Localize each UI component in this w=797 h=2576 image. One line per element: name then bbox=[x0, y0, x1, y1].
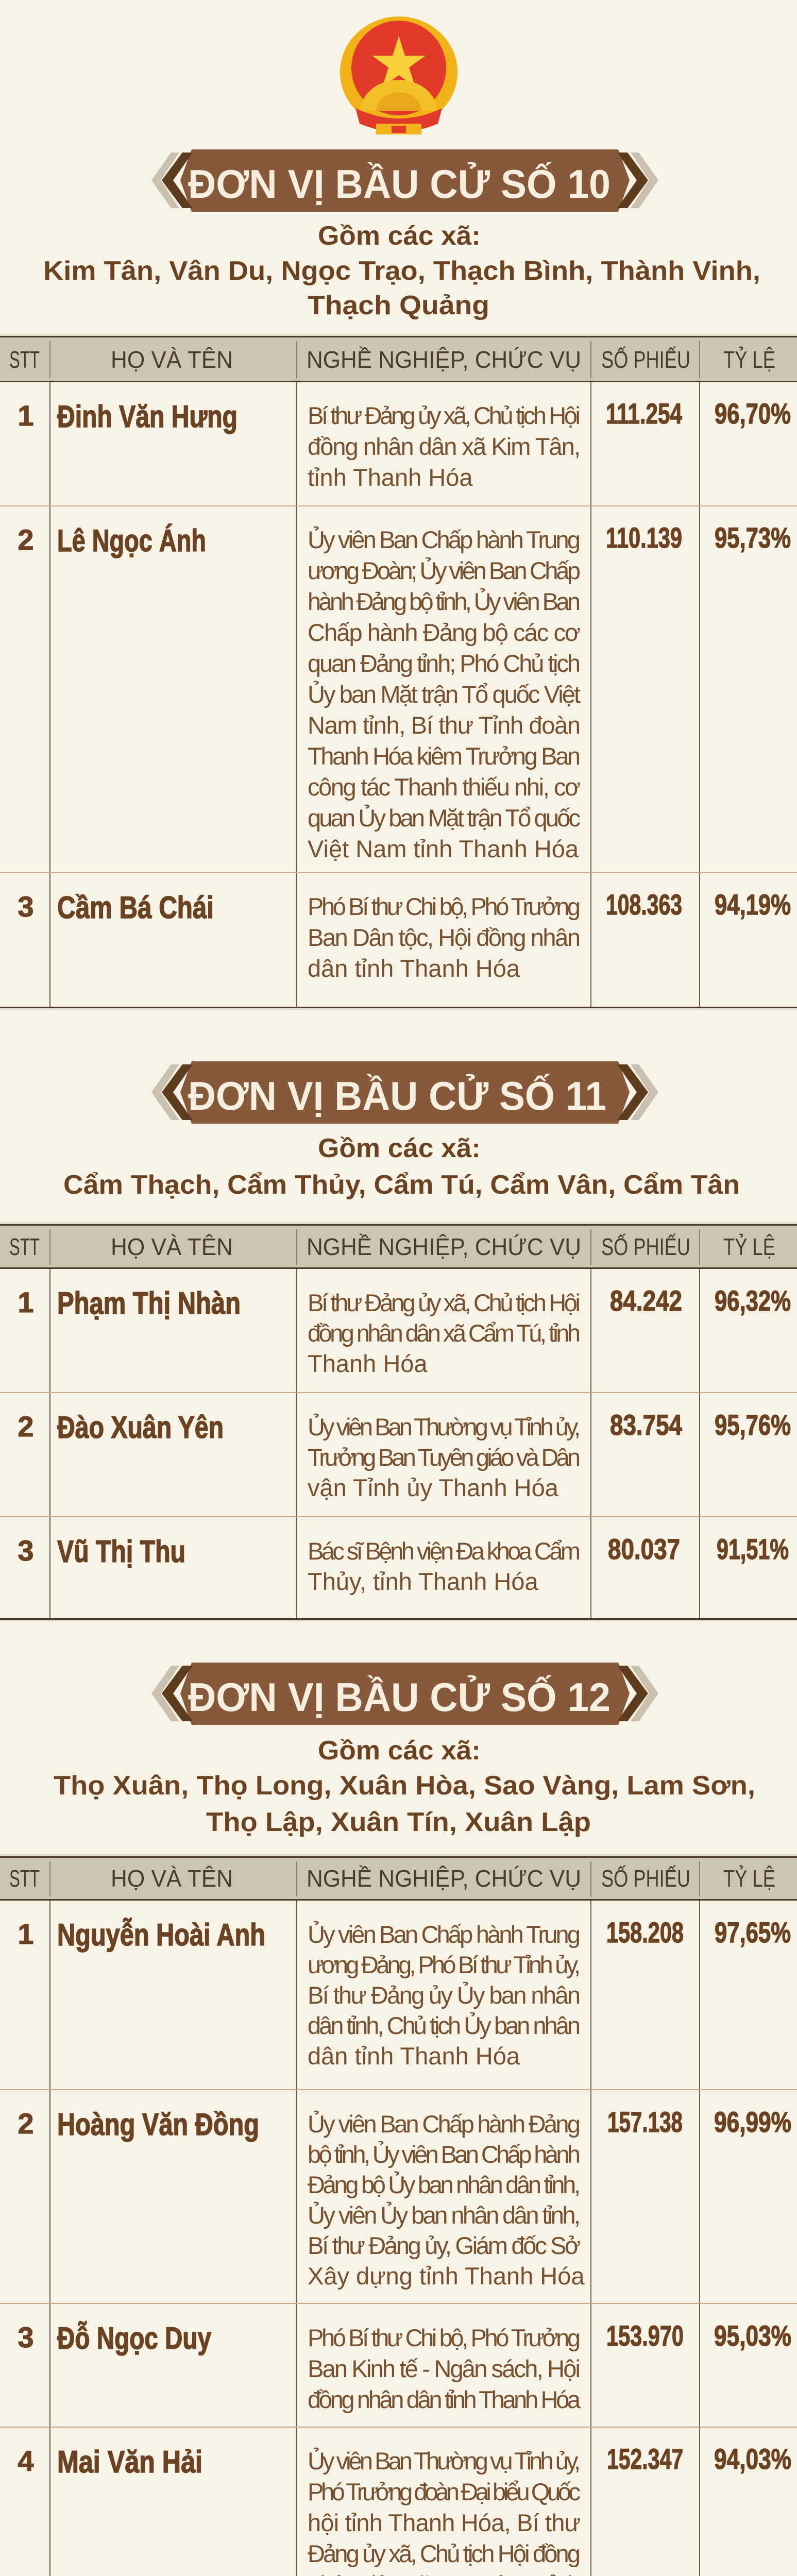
row: Lê Ngọc Ánh: 2 bbox=[18, 523, 34, 556]
row: Hoàng Văn Đồng: 157.138 bbox=[607, 2106, 683, 2138]
row: Đinh Văn Hưng: tỉnh Thanh Hóa bbox=[308, 464, 473, 491]
row: Cầm Bá Chái: Phó Bí thư Chi bộ, Phó Trưởng bbox=[308, 893, 581, 920]
table header: TỶ LỆ bbox=[723, 346, 775, 373]
row: Mai Văn Hải: 4 bbox=[18, 2445, 34, 2477]
subtitle: section 11 communes bbox=[63, 1133, 740, 1200]
row: Đào Xuân Yên: Ủy viên Ban Thường vụ Tỉnh ủy, bbox=[308, 1413, 581, 1440]
row: Đào Xuân Yên: 83.754 bbox=[610, 1409, 682, 1441]
row: Hoàng Văn Đồng: Ủy viên Ủy ban nhân dân tỉnh, bbox=[308, 2201, 581, 2229]
row: Đào Xuân Yên: Đào Xuân Yên bbox=[57, 1410, 224, 1445]
row: Lê Ngọc Ánh: Việt Nam tỉnh Thanh Hóa bbox=[308, 835, 579, 862]
table header: HỌ VÀ TÊN bbox=[111, 1233, 233, 1260]
banner: section 10 heading: ĐƠN VỊ BẦU CỬ SỐ 10 bbox=[188, 161, 611, 207]
row: Đỗ Ngọc Duy: Đỗ Ngọc Duy bbox=[57, 2321, 211, 2355]
row: Đỗ Ngọc Duy: Phó Bí thư Chi bộ, Phó Trưởng bbox=[308, 2324, 581, 2351]
row: Lê Ngọc Ánh: Nam tỉnh, Bí thư Tỉnh đoàn bbox=[308, 711, 581, 739]
row: Phạm Thị Nhàn: Thanh Hóa bbox=[308, 1350, 428, 1377]
row: Phạm Thị Nhàn: 1 bbox=[18, 1286, 34, 1318]
row: Đinh Văn Hưng: đồng nhân dân xã Kim Tân, bbox=[308, 433, 581, 460]
row: Nguyễn Hoài Anh: dân tỉnh, Chủ tịch Ủy ban nhân bbox=[308, 2012, 581, 2039]
row: Vũ Thị Thu: Vũ Thị Thu bbox=[57, 1534, 185, 1569]
row: Lê Ngọc Ánh: 110.139 bbox=[606, 521, 682, 554]
row: Lê Ngọc Ánh: Lê Ngọc Ánh bbox=[57, 523, 206, 558]
table header bbox=[0, 1222, 797, 1269]
row: Lê Ngọc Ánh: Ủy viên Ban Chấp hành Trung bbox=[308, 526, 581, 553]
subtitle: section 10 communes: Kim Tân, Vân Du, Ngọc Trạo, Thạch Bình, Thành Vinh, bbox=[43, 256, 760, 286]
row: Nguyễn Hoài Anh: Bí thư Đảng ủy Ủy ban nhân bbox=[308, 1981, 581, 2009]
row: Lê Ngọc Ánh: quan Đảng tỉnh; Phó Chủ tịch bbox=[308, 650, 581, 677]
subtitle: section 11 communes: Cẩm Thạch, Cẩm Thủy, Cẩm Tú, Cẩm Vân, Cẩm Tân bbox=[63, 1170, 740, 1200]
table header: NGHỀ NGHIỆP, CHỨC VỤ bbox=[307, 1233, 581, 1260]
row: Mai Văn Hải: 152.347 bbox=[607, 2443, 683, 2475]
row: Nguyễn Hoài Anh: 1 bbox=[18, 1918, 34, 1950]
subtitle: section 10 communes: Gồm các xã: bbox=[318, 221, 481, 251]
row: Lê Ngọc Ánh: Thanh Hóa kiêm Trưởng Ban bbox=[308, 742, 581, 770]
row: Mai Văn Hải: Đảng ủy xã, Chủ tịch Hội đồng bbox=[308, 2540, 581, 2567]
row: Lê Ngọc Ánh: quan Ủy ban Mặt trận Tổ quốc bbox=[308, 804, 581, 832]
table header: STT bbox=[9, 346, 40, 373]
table header: SỐ PHIẾU bbox=[601, 1865, 690, 1892]
banner: section 12 heading bbox=[151, 1663, 658, 1725]
row: Đinh Văn Hưng: 1 bbox=[18, 399, 34, 432]
row: Nguyễn Hoài Anh bbox=[18, 1916, 791, 2070]
table header: SỐ PHIẾU bbox=[601, 1233, 690, 1260]
table header: TỶ LỆ bbox=[723, 1233, 775, 1260]
row: Cầm Bá Chái: 108.363 bbox=[606, 888, 682, 921]
row: Nguyễn Hoài Anh: ương Đảng, Phó Bí thư Tỉnh ủy, bbox=[308, 1951, 581, 1978]
table header: TỶ LỆ bbox=[723, 1865, 775, 1892]
row: Lê Ngọc Ánh: công tác Thanh thiếu nhi, cơ bbox=[308, 773, 581, 801]
table header: STT bbox=[9, 1233, 40, 1260]
row: Phạm Thị Nhàn: đồng nhân dân xã Cẩm Tú, tỉnh bbox=[308, 1319, 581, 1347]
row: Đinh Văn Hưng: 111.254 bbox=[606, 397, 682, 430]
row: Lê Ngọc Ánh: Ủy ban Mặt trận Tổ quốc Việt bbox=[308, 681, 581, 708]
row: Phạm Thị Nhàn: Bí thư Đảng ủy xã, Chủ tịch Hội bbox=[308, 1289, 581, 1316]
row: Mai Văn Hải: Ủy viên Ban Thường vụ Tỉnh ủy, bbox=[308, 2447, 581, 2475]
table: section 11 results bbox=[0, 1222, 797, 1621]
row: Đinh Văn Hưng: Bí thư Đảng ủy xã, Chủ tịch Hội bbox=[308, 402, 581, 429]
table header: HỌ VÀ TÊN bbox=[111, 1865, 233, 1892]
row: Lê Ngọc Ánh: Chấp hành Đảng bộ các cơ bbox=[308, 619, 581, 646]
subtitle: section 12 communes: Gồm các xã: bbox=[318, 1736, 481, 1766]
row: Hoàng Văn Đồng: Hoàng Văn Đồng bbox=[57, 2107, 259, 2142]
row: Nguyễn Hoài Anh: Nguyễn Hoài Anh bbox=[57, 1918, 265, 1952]
row: Phạm Thị Nhàn: 84.242 bbox=[610, 1284, 682, 1317]
row: Hoàng Văn Đồng bbox=[18, 2106, 791, 2290]
table header: NGHỀ NGHIỆP, CHỨC VỤ bbox=[307, 1865, 581, 1892]
icon: national emblem bbox=[340, 16, 457, 134]
banner: section 10 heading bbox=[151, 149, 658, 212]
table: section 12 results bbox=[0, 1854, 797, 2576]
banner: section 11 heading: ĐƠN VỊ BẦU CỬ SỐ 11 bbox=[188, 1073, 606, 1118]
row: Mai Văn Hải: Mai Văn Hải bbox=[57, 2445, 202, 2479]
row: Mai Văn Hải: hội tỉnh Thanh Hóa, Bí thư bbox=[308, 2509, 581, 2536]
row: Mai Văn Hải: Phó Trưởng đoàn Đại biểu Quốc bbox=[308, 2478, 581, 2505]
row: Hoàng Văn Đồng: bộ tỉnh, Ủy viên Ban Chấp hành bbox=[308, 2141, 581, 2168]
subtitle: section 10 communes bbox=[43, 221, 760, 320]
row: Hoàng Văn Đồng: Đảng bộ Ủy ban nhân dân tỉnh, bbox=[308, 2171, 581, 2198]
banner: section 12 heading: ĐƠN VỊ BẦU CỬ SỐ 12 bbox=[188, 1674, 611, 1720]
row: Cầm Bá Chái bbox=[18, 888, 791, 982]
row: Đào Xuân Yên: 2 bbox=[18, 1410, 34, 1443]
subtitle: section 11 communes: Gồm các xã: bbox=[318, 1133, 481, 1163]
row: Đỗ Ngọc Duy bbox=[18, 2319, 791, 2413]
table header: STT bbox=[9, 1865, 40, 1892]
table: section 10 results bbox=[0, 334, 797, 1010]
row: Nguyễn Hoài Anh: Ủy viên Ban Chấp hành Trung bbox=[308, 1921, 581, 1948]
subtitle: section 10 communes: Thạch Quảng bbox=[308, 291, 489, 320]
row: Vũ Thị Thu: 80.037 bbox=[608, 1533, 680, 1565]
row: Nguyễn Hoài Anh: dân tỉnh Thanh Hóa bbox=[308, 2042, 520, 2070]
banner: section 11 heading bbox=[151, 1061, 658, 1124]
table header bbox=[0, 1854, 797, 1901]
subtitle: section 12 communes bbox=[54, 1736, 755, 1837]
row: Đỗ Ngọc Duy: Ban Kinh tế - Ngân sách, Hội bbox=[308, 2355, 581, 2382]
row: Hoàng Văn Đồng: Ủy viên Ban Chấp hành Đảng bbox=[308, 2110, 581, 2138]
row: Đỗ Ngọc Duy: 3 bbox=[18, 2321, 34, 2353]
row: Cầm Bá Chái: dân tỉnh Thanh Hóa bbox=[308, 955, 520, 982]
row: Lê Ngọc Ánh: hành Đảng bộ tỉnh, Ủy viên Ban bbox=[308, 588, 581, 615]
row: Cầm Bá Chái: Cầm Bá Chái bbox=[57, 890, 214, 925]
row: Vũ Thị Thu: 3 bbox=[18, 1534, 34, 1567]
subtitle: section 12 communes: Thọ Xuân, Thọ Long, Xuân Hòa, Sao Vàng, Lam Sơn, bbox=[54, 1771, 755, 1801]
row: Đinh Văn Hưng bbox=[18, 397, 791, 491]
table header bbox=[0, 334, 797, 382]
row: Mai Văn Hải bbox=[18, 2443, 791, 2576]
row: Đinh Văn Hưng: Đinh Văn Hưng bbox=[57, 399, 238, 434]
row: Cầm Bá Chái: 3 bbox=[18, 890, 34, 923]
table header: HỌ VÀ TÊN bbox=[111, 346, 233, 373]
row: Cầm Bá Chái: Ban Dân tộc, Hội đồng nhân bbox=[308, 924, 581, 951]
row: Đỗ Ngọc Duy: 153.970 bbox=[606, 2319, 684, 2352]
row: Hoàng Văn Đồng: 2 bbox=[18, 2107, 34, 2140]
row: Phạm Thị Nhàn bbox=[18, 1284, 791, 1377]
row: Phạm Thị Nhàn: Phạm Thị Nhàn bbox=[57, 1286, 241, 1320]
subtitle: section 12 communes: Thọ Lập, Xuân Tín, Xuân Lập bbox=[206, 1807, 591, 1837]
row: Đào Xuân Yên: vận Tỉnh ủy Thanh Hóa bbox=[308, 1474, 559, 1501]
row: Hoàng Văn Đồng: Bí thư Đảng ủy, Giám đốc Sở bbox=[308, 2232, 581, 2259]
row: Đỗ Ngọc Duy: đồng nhân dân tỉnh Thanh Hóa bbox=[308, 2386, 581, 2413]
row: Hoàng Văn Đồng: Xây dựng tỉnh Thanh Hóa bbox=[308, 2262, 585, 2290]
table header: NGHỀ NGHIỆP, CHỨC VỤ bbox=[307, 346, 581, 373]
row: Vũ Thị Thu bbox=[18, 1533, 789, 1595]
row: Vũ Thị Thu: Bác sĩ Bệnh viện Đa khoa Cẩm bbox=[308, 1537, 581, 1565]
row: Nguyễn Hoài Anh: 158.208 bbox=[606, 1916, 684, 1948]
row: Lê Ngọc Ánh bbox=[18, 521, 791, 862]
row: Vũ Thị Thu: Thủy, tỉnh Thanh Hóa bbox=[308, 1568, 539, 1595]
row: Đào Xuân Yên: Trưởng Ban Tuyên giáo và Dân bbox=[308, 1444, 581, 1471]
table header: SỐ PHIẾU bbox=[601, 346, 690, 373]
row: Đào Xuân Yên bbox=[18, 1409, 791, 1501]
row: Lê Ngọc Ánh: ương Đoàn; Ủy viên Ban Chấp bbox=[308, 557, 581, 584]
